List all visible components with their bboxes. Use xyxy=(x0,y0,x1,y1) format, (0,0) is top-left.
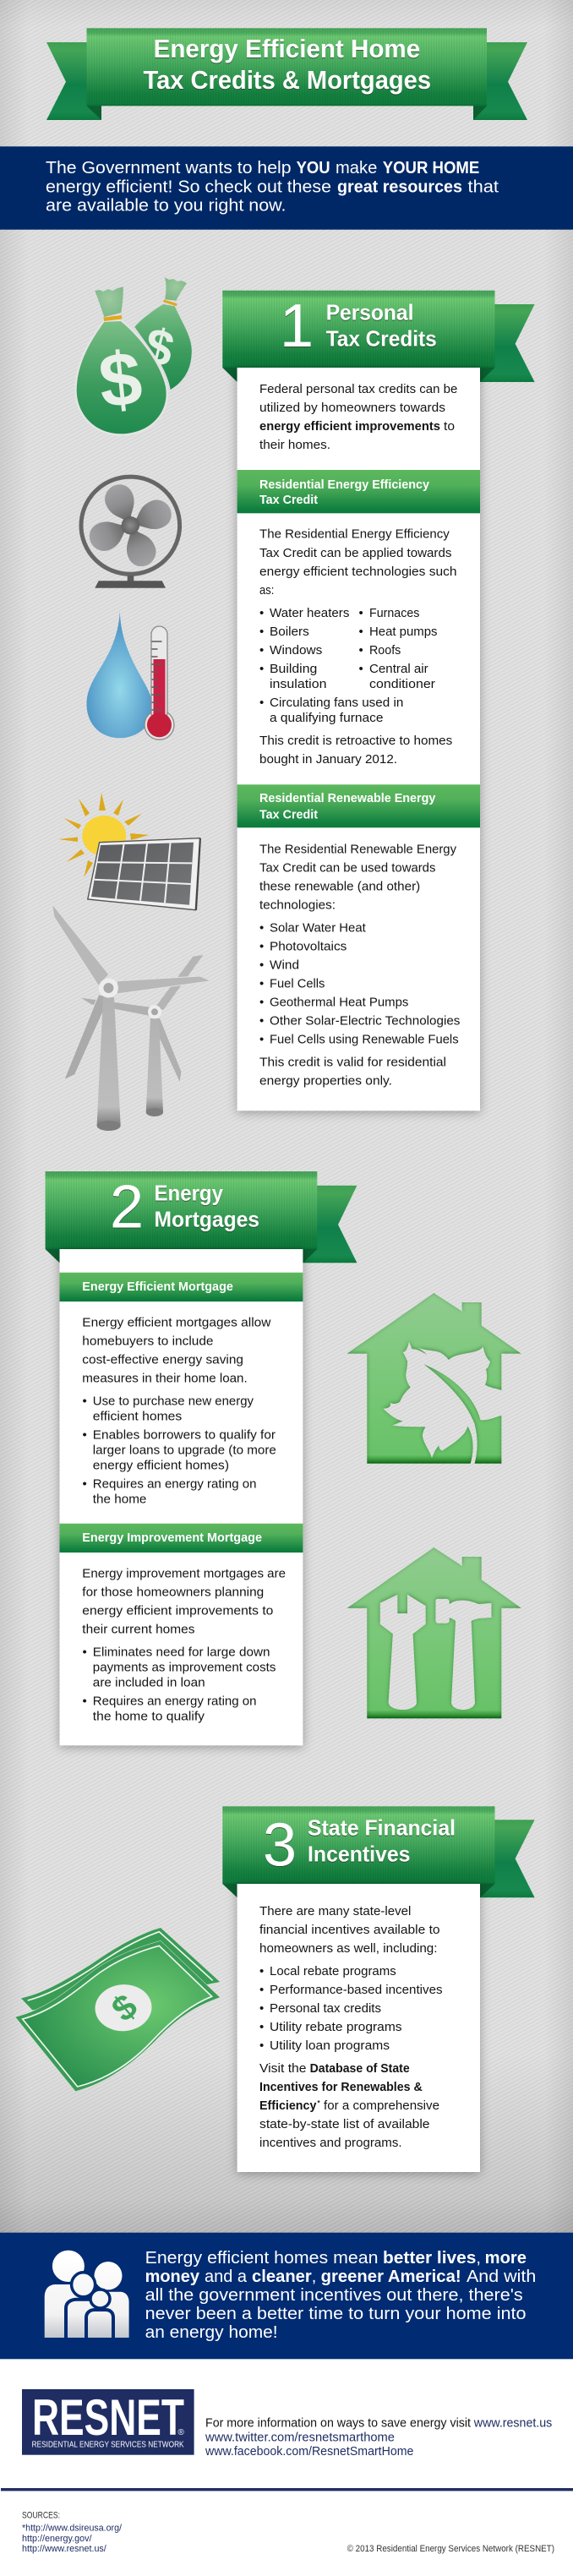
contact links xyxy=(205,2416,552,2459)
list: state programs: • xyxy=(259,2020,264,2034)
section title 2: Mortgages xyxy=(154,1207,259,1232)
list: efficient technologies xyxy=(259,606,438,725)
text: improvement mortgage: their current homes xyxy=(82,1623,194,1637)
text: state incentives xyxy=(259,1904,440,1956)
copyright: © 2013 Residential Energy Services Network (RESNET) xyxy=(347,2544,554,2554)
list: efficient mortgage points: energy efficient homes) xyxy=(93,1459,229,1473)
contact links: www.facebook.com/ResnetSmartHome xyxy=(205,2444,413,2459)
text: efficiency credit xyxy=(259,527,456,598)
intro band: YOU xyxy=(297,159,330,177)
list: efficient mortgage points xyxy=(83,1394,276,1507)
text: database pointer: for a comprehensive xyxy=(324,2098,439,2113)
intro band: make xyxy=(336,159,377,177)
list: efficient mortgage points: • xyxy=(83,1428,87,1443)
intro band: energy efficient! So check out these xyxy=(46,177,331,196)
closing text: more xyxy=(485,2249,527,2268)
icon: family xyxy=(45,2251,129,2341)
list: efficient mortgage points: Requires an energy rating on xyxy=(93,1477,257,1492)
note: retroactive: bought in January 2012. xyxy=(259,752,397,767)
text: renewable credit: technologies: xyxy=(259,898,336,912)
list: efficient technologies: Building xyxy=(270,662,317,676)
closing text: Energy efficient homes mean xyxy=(145,2249,379,2268)
list: efficient technologies: insulation xyxy=(270,677,326,691)
closing text: money xyxy=(145,2268,200,2286)
list: improvement mortgage points: Requires an energy rating on xyxy=(93,1695,257,1709)
sub-header: residential energy efficiency xyxy=(237,470,480,513)
icon: fan xyxy=(81,477,180,588)
section title 1 xyxy=(326,299,437,351)
list: efficient technologies: Circulating fans used in xyxy=(270,696,403,710)
text: database pointer: Efficiency xyxy=(259,2098,317,2113)
list: renewable technologies xyxy=(259,920,460,1046)
text: improvement mortgage xyxy=(82,1567,286,1637)
list: state programs xyxy=(259,1964,443,2053)
list: state programs: Utility rebate programs xyxy=(270,2020,402,2034)
note: retroactive xyxy=(259,734,452,767)
text: state incentives: financial incentives available to xyxy=(259,1923,440,1937)
section title 1: Tax Credits xyxy=(326,325,437,351)
closing text: better lives xyxy=(383,2249,476,2268)
panel: section 1 personal tax credits xyxy=(222,291,535,1111)
list: efficient technologies: Heat pumps xyxy=(369,625,438,639)
list: efficient technologies: • xyxy=(259,696,264,710)
list: state programs: • xyxy=(259,2038,264,2053)
icon: sun and solar panel xyxy=(58,793,201,910)
contact links: For more information on ways to save energy visit xyxy=(205,2416,472,2431)
closing text xyxy=(145,2249,536,2342)
text: efficiency credit: as: xyxy=(259,583,274,598)
text: database pointer: Visit the xyxy=(259,2061,306,2076)
list: renewable technologies: Fuel Cells xyxy=(270,976,325,991)
card background 2 xyxy=(59,1249,303,1745)
closing text: and a xyxy=(205,2268,248,2286)
list: renewable technologies: • xyxy=(259,939,264,953)
closing text: never been a better time to turn your home into xyxy=(145,2305,527,2323)
list: efficient mortgage points: • xyxy=(83,1394,87,1409)
list: renewable technologies: Wind xyxy=(270,958,299,972)
text: database pointer: state-by-state list of available xyxy=(259,2117,429,2131)
intro text 1: Federal personal tax credits can be xyxy=(259,382,457,396)
closing text: an energy home! xyxy=(145,2323,278,2342)
sub-header: energy improvement mortgage xyxy=(59,1524,303,1553)
list: renewable technologies: • xyxy=(259,1032,264,1046)
text: database pointer: * xyxy=(318,2099,321,2107)
list: improvement mortgage points: the home to qualify xyxy=(93,1710,205,1724)
sub-header: residential renewable energy: Residential Renewable Energy xyxy=(259,791,436,805)
sub-header: residential energy efficiency: Tax Credit xyxy=(259,493,318,507)
text: efficient mortgage: homebuyers to include xyxy=(82,1334,214,1349)
panel: section 3 state financial incentives xyxy=(222,1806,535,2172)
list: efficient technologies: Windows xyxy=(270,643,322,658)
icon: money bags xyxy=(77,277,192,434)
list: improvement mortgage points: Eliminates need for large down xyxy=(93,1645,270,1660)
text: efficient mortgage: Energy efficient mortgages allow xyxy=(82,1316,271,1330)
list: renewable technologies: • xyxy=(259,958,264,972)
intro text 1: their homes. xyxy=(259,438,330,452)
list: efficient mortgage points: • xyxy=(83,1477,87,1492)
panel: section 2 energy mortgages xyxy=(46,1171,357,1745)
list: renewable technologies: • xyxy=(259,976,264,991)
closing band xyxy=(0,2233,573,2359)
sources: *http://www.dsireusa.org/ xyxy=(22,2524,123,2534)
list: improvement mortgage points: • xyxy=(83,1695,87,1709)
list: efficient mortgage points: the home xyxy=(93,1493,146,1507)
text: efficient mortgage: measures in their home loan. xyxy=(82,1372,248,1386)
section title 2: Energy xyxy=(154,1181,223,1206)
list: state programs: • xyxy=(259,1964,264,1978)
icon: dollar bills xyxy=(15,1928,220,2091)
list: efficient technologies: Central air xyxy=(369,662,428,676)
logo: RESNET: RESNET xyxy=(32,2389,184,2446)
text: improvement mortgage: Energy improvement mortgages are xyxy=(82,1567,286,1581)
title ribbon xyxy=(46,28,527,120)
intro band xyxy=(0,146,573,230)
thermometer xyxy=(145,626,174,740)
icon: water drop and thermometer xyxy=(86,611,174,740)
closing text: , xyxy=(476,2249,481,2268)
list: renewable technologies: Other Solar-Electric Technologies xyxy=(270,1013,460,1028)
icon: money bags: $ xyxy=(95,336,146,424)
intro text 1: to xyxy=(444,419,455,434)
title text xyxy=(144,34,431,95)
note: residential only xyxy=(259,1055,446,1088)
ribbon: section 1 xyxy=(222,291,535,382)
list: efficient mortgage points: larger loans to upgrade (to more xyxy=(93,1444,276,1458)
list: state programs: • xyxy=(259,2001,264,2016)
closing text: all the government incentives out there, there's xyxy=(145,2286,523,2305)
title text: Tax Credits & Mortgages xyxy=(144,65,431,95)
contact links: www.twitter.com/resnetsmarthome xyxy=(205,2430,395,2444)
icon: house with tools xyxy=(347,1547,521,1718)
intro text 1: utilized by homeowners towards xyxy=(259,401,445,415)
contact links: www.resnet.us xyxy=(473,2416,552,2431)
closing text: cleaner xyxy=(252,2268,312,2286)
list: renewable technologies: • xyxy=(259,920,264,935)
intro band: great resources xyxy=(337,177,462,196)
closing text: And with xyxy=(467,2268,536,2286)
icon: dollar bills: $ xyxy=(104,1986,145,2029)
list: state programs: Performance-based incentives xyxy=(270,1983,443,1997)
section title 1: Personal xyxy=(326,299,413,325)
sub-header: energy efficient mortgage: Energy Efficient Mortgage xyxy=(82,1280,233,1294)
text: state incentives: There are many state-level xyxy=(259,1904,411,1918)
list: state programs: • xyxy=(259,1983,264,1997)
list: efficient technologies: • xyxy=(358,606,363,620)
text: improvement mortgage: for those homeowners planning xyxy=(82,1585,264,1600)
text: database pointer xyxy=(259,2061,439,2150)
logo: RESNET: ® xyxy=(177,2428,184,2437)
icon: money bags: $ xyxy=(139,317,179,379)
section title 3: Incentives xyxy=(308,1842,411,1867)
list: state programs: Personal tax credits xyxy=(270,2001,381,2016)
intro band: that xyxy=(468,177,499,196)
text: renewable credit xyxy=(259,842,456,912)
intro band: The Government wants to help xyxy=(46,159,292,177)
list: efficient technologies: • xyxy=(358,643,363,658)
sources: http://energy.gov/ xyxy=(22,2534,92,2544)
list: efficient technologies: • xyxy=(358,625,363,639)
card background 1 xyxy=(237,368,480,1111)
section number 1: 1 xyxy=(280,292,314,360)
list: renewable technologies: • xyxy=(259,1013,264,1028)
list: renewable technologies: Geothermal Heat Pumps xyxy=(270,995,408,1009)
text: efficient mortgage xyxy=(82,1316,271,1386)
sub-header: energy improvement mortgage: Energy Improvement Mortgage xyxy=(82,1531,262,1545)
sub-header: residential energy efficiency: Residential Energy Efficiency xyxy=(259,478,430,492)
card background 3 xyxy=(237,1884,480,2172)
list: improvement mortgage points xyxy=(83,1645,276,1724)
list: state programs: Local rebate programs xyxy=(270,1964,396,1978)
icon: wind turbines xyxy=(52,903,211,1131)
list: state programs: Utility loan programs xyxy=(270,2038,390,2053)
list: efficient technologies: • xyxy=(259,643,264,658)
section title 2 xyxy=(154,1181,259,1232)
sub-header: residential renewable energy: Tax Credit xyxy=(259,807,318,821)
list: efficient mortgage points: efficient homes xyxy=(93,1410,182,1424)
sources xyxy=(22,2510,123,2554)
list: efficient technologies: • xyxy=(259,606,264,620)
list: improvement mortgage points: payments as improvement costs xyxy=(93,1661,276,1675)
note: residential only: energy properties only. xyxy=(259,1073,392,1088)
list: efficient technologies: • xyxy=(259,625,264,639)
sub-header: residential renewable energy xyxy=(237,784,480,827)
logo: RESNET: RESIDENTIAL ENERGY SERVICES NETWORK xyxy=(32,2441,184,2450)
list: renewable technologies: • xyxy=(259,995,264,1009)
closing text: greener America! xyxy=(321,2268,461,2286)
text: efficiency credit: Tax Credit can be applied towards xyxy=(259,546,451,560)
list: efficient technologies: Roofs xyxy=(369,643,401,658)
section title 3 xyxy=(308,1815,456,1867)
list: renewable technologies: Photovoltaics xyxy=(270,939,347,953)
text: improvement mortgage: energy efficient improvements to xyxy=(82,1604,273,1618)
list: efficient technologies: Furnaces xyxy=(369,606,419,620)
list: improvement mortgage points: are included in loan xyxy=(93,1676,205,1690)
text: renewable credit: The Residential Renewable Energy xyxy=(259,842,456,856)
intro band: are available to you right now. xyxy=(46,196,286,215)
ribbon: section 3 xyxy=(222,1806,535,1897)
section title 3: State Financial xyxy=(308,1815,456,1841)
intro band: YOUR HOME xyxy=(383,159,479,177)
text: renewable credit: these renewable (and other) xyxy=(259,879,420,893)
text: renewable credit: Tax Credit can be used towards xyxy=(259,860,435,875)
list: efficient mortgage points: Use to purchase new energy xyxy=(93,1394,254,1409)
list: efficient technologies: • xyxy=(259,662,264,676)
section number 3: 3 xyxy=(263,1812,297,1880)
text: efficient mortgage: cost-effective energy saving xyxy=(82,1353,243,1367)
list: renewable technologies: Solar Water Heat xyxy=(270,920,367,935)
list: efficient technologies: a qualifying furnace xyxy=(270,711,384,725)
list: efficient mortgage points: Enables borrowers to qualify for xyxy=(93,1428,276,1443)
text: efficiency credit: energy efficient technologies such xyxy=(259,565,456,579)
text: database pointer: Database of State xyxy=(310,2061,410,2076)
sub-header: energy efficient mortgage xyxy=(59,1273,303,1302)
list: efficient technologies: Boilers xyxy=(270,625,309,639)
list: renewable technologies: Fuel Cells using Renewable Fuels xyxy=(270,1032,459,1046)
list: improvement mortgage points: • xyxy=(83,1645,87,1660)
sources: http://www.resnet.us/ xyxy=(22,2544,107,2554)
section number 2: 2 xyxy=(110,1174,144,1242)
list: efficient technologies: Water heaters xyxy=(270,606,349,620)
note: residential only: This credit is valid for residential xyxy=(259,1055,446,1069)
text: state incentives: homeowners as well, including: xyxy=(259,1941,438,1956)
intro text 1 xyxy=(259,382,457,452)
text: efficiency credit: The Residential Energy Efficiency xyxy=(259,527,450,542)
note: retroactive: This credit is retroactive to homes xyxy=(259,734,452,748)
closing text: , xyxy=(312,2268,316,2286)
sources: SOURCES: xyxy=(22,2510,60,2520)
ribbon: section 2 xyxy=(46,1171,357,1263)
logo: RESNET xyxy=(22,2389,194,2455)
icon: house with leaf xyxy=(347,1293,521,1464)
title text: Energy Efficient Home xyxy=(154,34,420,63)
list: efficient technologies: • xyxy=(358,662,363,676)
list: efficient technologies: conditioner xyxy=(369,677,435,691)
intro text 1: energy efficient improvements xyxy=(259,419,440,434)
text: database pointer: incentives and programs. xyxy=(259,2136,402,2150)
text: database pointer: Incentives for Renewables & xyxy=(259,2080,423,2094)
